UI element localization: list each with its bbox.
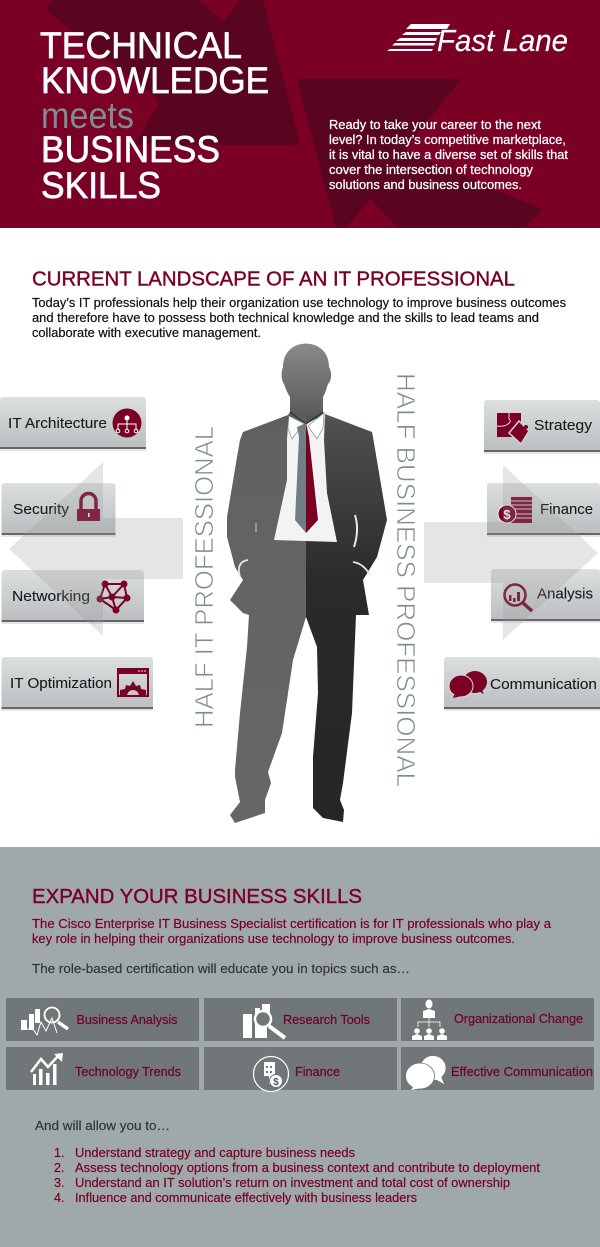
tile: Business Analysis [6, 998, 199, 1041]
landscape text: and therefore have to possess both technical knowledge and the skills to lead teams and [32, 311, 539, 325]
tile: Research Tools: Research Tools [283, 1013, 370, 1027]
card: Networking: Networking [12, 588, 90, 605]
collar [288, 413, 324, 439]
tile: Technology Trends: Technology Trends [75, 1065, 181, 1079]
logo: Fast Lane [387, 23, 568, 58]
tile: Organizational Change [401, 998, 594, 1041]
landscape text: Today’s IT professionals help their organization use technology to improve business outcomes [32, 296, 566, 310]
pockets and highlights [239, 515, 370, 577]
label: half business professional: HALF BUSINESS PROFESSIONAL [391, 373, 421, 787]
tile: Finance [204, 1047, 397, 1092]
arrow: right [424, 465, 598, 640]
icon: magnifier chart [504, 584, 532, 611]
jaw shadow [290, 412, 323, 424]
card: Analysis [491, 569, 600, 623]
title: SKILLS [41, 165, 161, 206]
card: Strategy: Strategy [534, 417, 593, 434]
numbered list: Assess technology options from a business context and contribute to deployment [75, 1161, 541, 1175]
title [40, 25, 269, 206]
icon: speech bubbles [449, 671, 487, 698]
arrow: left [9, 462, 183, 636]
card: Communication: Communication [490, 676, 597, 693]
numbered list: Understand an IT solution’s return on investment and total cost of ownership [75, 1176, 510, 1190]
tile: Effective Communication: Effective Communication [451, 1065, 593, 1079]
tie [295, 423, 318, 533]
icon: hierarchy [112, 408, 142, 438]
icon: gear window [117, 668, 149, 696]
numbered list: Influence and communicate effectively with business leaders [75, 1191, 417, 1205]
numbered list: Understand strategy and capture business needs [75, 1146, 355, 1160]
intro text: Ready to take your career to the next [329, 118, 542, 132]
landscape text [32, 296, 566, 340]
icon: building coin [254, 1056, 288, 1092]
intro text: it is vital to have a diverse set of skills that [329, 148, 569, 162]
card: Security: Security [13, 501, 70, 518]
icon: coins: $ [503, 507, 511, 522]
card: IT Architecture: IT Architecture [8, 415, 107, 432]
card: Networking [2, 570, 144, 624]
card: Strategy [484, 400, 600, 454]
title: meets [41, 95, 134, 136]
icon: building coin: $ [273, 1077, 279, 1088]
icon: chart magnifier [21, 1008, 68, 1035]
card: Finance: Finance [540, 501, 593, 518]
intro text: solutions and business outcomes. [329, 178, 522, 192]
certification text: key role in helping their organizations use technology to improve business outcomes. [32, 932, 515, 946]
card: Finance [487, 483, 600, 537]
icon: padlock [77, 494, 100, 521]
intro text: cover the intersection of technology [329, 163, 534, 177]
role-based text: The role-based certification will educate you in topics such as… [32, 962, 410, 976]
landscape text: collaborate with executive management. [32, 326, 261, 340]
intro text [329, 118, 569, 192]
tile: Research Tools [204, 998, 397, 1041]
card: Security [2, 483, 116, 537]
icon: bubbles [406, 1056, 446, 1090]
title: BUSINESS [41, 129, 220, 170]
tile: Organizational Change: Organizational Change [454, 1012, 583, 1026]
card: Communication [444, 657, 600, 711]
intro text: level? In today’s competitive marketplace, [329, 133, 566, 147]
and will allow you to: And will allow you to… [35, 1119, 170, 1133]
tile: Technology Trends [6, 1047, 199, 1090]
numbered list [54, 1146, 541, 1205]
panel: header [0, 0, 600, 228]
tile: Business Analysis: Business Analysis [76, 1013, 178, 1027]
icon: trend arrow [31, 1053, 63, 1085]
card: IT Architecture [0, 397, 146, 451]
numbered list: 3. [54, 1176, 64, 1190]
title: KNOWLEDGE [41, 60, 269, 101]
numbered list: 4. [54, 1191, 64, 1205]
label: half IT professional: HALF IT PROFESSIONAL [191, 426, 219, 728]
icon: bars magnifier [243, 1004, 285, 1038]
numbered list: 1. [54, 1146, 64, 1160]
shirt [274, 414, 337, 542]
logo: Fast Lane: Fast Lane [437, 23, 568, 58]
tile: Finance: Finance [295, 1065, 340, 1079]
certification text: The Cisco Enterprise IT Business Specialist certification is for IT professionals who play a [32, 917, 551, 931]
certification text [32, 917, 551, 946]
icon: org chart [412, 1000, 447, 1040]
numbered list: 2. [54, 1161, 64, 1175]
heading: current landscape: CURRENT LANDSCAPE OF AN IT PROFESSIONAL [32, 268, 515, 290]
card: IT Optimization: IT Optimization [10, 675, 112, 692]
panel: expand your business skills [0, 847, 600, 1247]
icon: network [97, 581, 130, 613]
card: IT Optimization [2, 657, 153, 711]
title: TECHNICAL [40, 25, 242, 66]
figure: businessman [227, 344, 387, 823]
icon: puzzle [497, 413, 529, 444]
heading: expand: EXPAND YOUR BUSINESS SKILLS [32, 885, 362, 908]
card: Analysis: Analysis [537, 586, 593, 602]
tile: Effective Communication [401, 1047, 594, 1090]
